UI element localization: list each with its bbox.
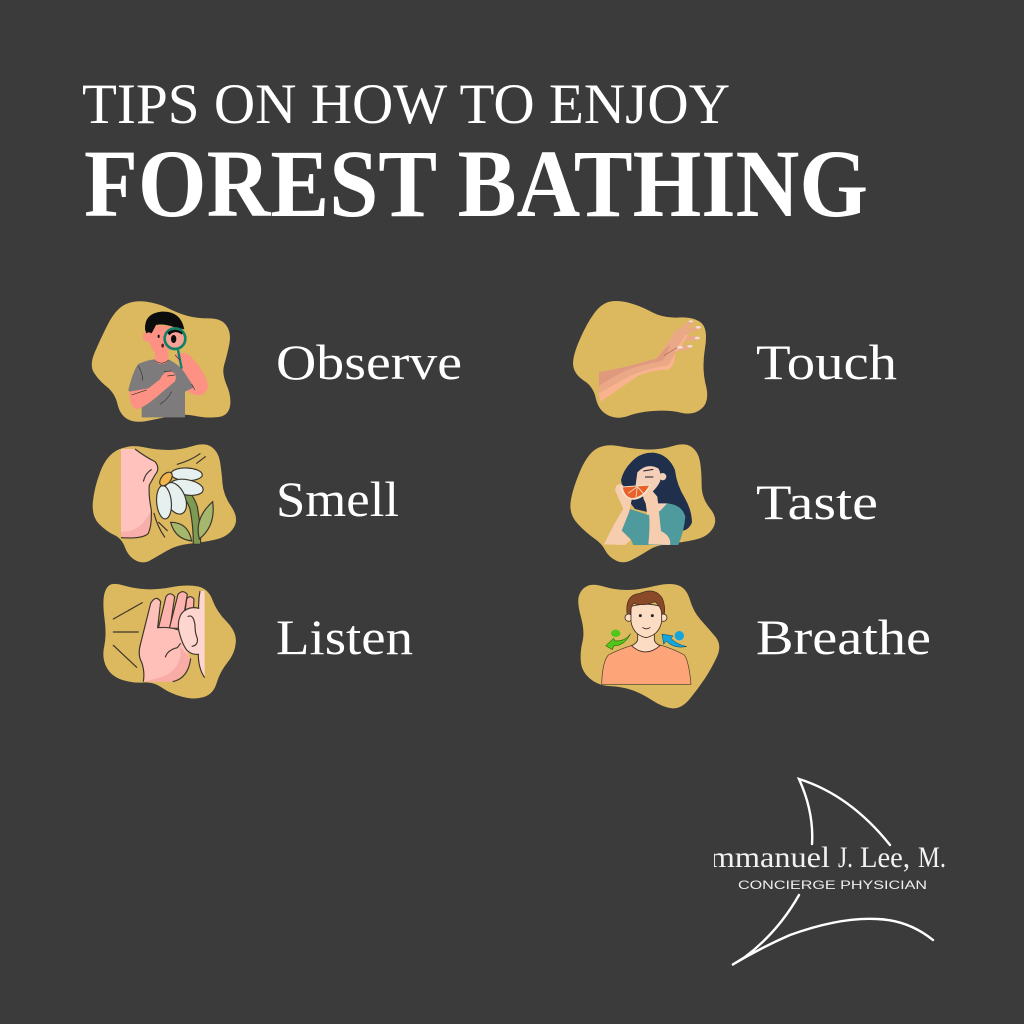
label: Smell: Smell <box>276 471 399 527</box>
logo name: Emmanuel <box>690 841 830 874</box>
item: Taste <box>570 444 878 562</box>
title: TIPS ON HOW TO ENJOY <box>82 73 730 136</box>
label: Touch: Touch <box>756 334 897 390</box>
infographic canvas <box>83 85 944 966</box>
label: Taste: Taste <box>756 474 878 530</box>
title <box>82 73 868 237</box>
label: Observe: Observe <box>276 334 462 390</box>
icon: reaching arm <box>573 301 707 418</box>
icon: woman eating orange slice <box>570 444 715 562</box>
icon: person with magnifying glass <box>92 301 230 422</box>
icon: hand cupped to ear <box>103 584 236 698</box>
item: Listen <box>103 584 413 698</box>
logo name: Lee, <box>860 841 910 874</box>
item: Smell <box>93 444 399 562</box>
label: Breathe: Breathe <box>756 609 931 665</box>
label: Listen: Listen <box>276 609 413 665</box>
icon: man breathing with arrows <box>578 584 719 708</box>
item: Touch <box>573 301 897 418</box>
logo tagline: CONCIERGE PHYSICIAN <box>738 878 927 892</box>
icon: nose smelling daisy <box>93 444 236 562</box>
logo fin strokes <box>732 779 933 965</box>
item: Breathe <box>578 584 931 708</box>
logo name <box>714 846 944 872</box>
title: FOREST BATHING <box>84 130 868 237</box>
logo name: J. <box>838 841 853 874</box>
logo name: M. <box>918 841 946 874</box>
logo: Emmanuel J. Lee <box>690 779 946 965</box>
item: Observe <box>92 301 462 422</box>
